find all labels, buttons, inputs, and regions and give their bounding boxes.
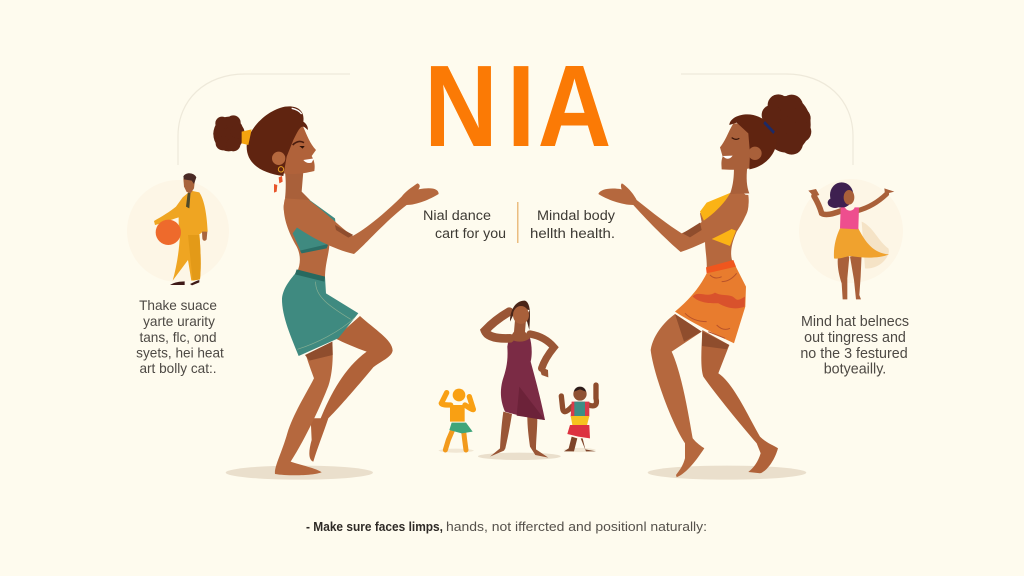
text block: left caption <box>136 298 224 376</box>
text block: left caption: Thake suace <box>139 298 217 313</box>
top <box>700 192 736 246</box>
title: NIA <box>424 42 611 171</box>
raised leg <box>309 316 393 462</box>
panel: left small figure <box>127 173 229 285</box>
child right <box>561 385 596 451</box>
neck <box>285 172 310 200</box>
footer note: hands, not iffercted and positionl naturally: <box>446 520 707 534</box>
hair <box>729 114 777 169</box>
illustration: right dancing woman <box>598 94 811 480</box>
text block: centre left: cart for you <box>435 226 506 241</box>
skirt <box>282 272 358 356</box>
child left <box>441 389 473 450</box>
ground shadows <box>438 448 596 453</box>
torso <box>700 193 749 270</box>
woman <box>485 301 554 458</box>
illustration: family group <box>438 301 596 460</box>
hair bun <box>762 94 811 155</box>
skirt <box>675 265 746 343</box>
text block: centre left <box>423 208 506 241</box>
top <box>293 198 336 253</box>
text block: centre right <box>530 208 615 241</box>
arm <box>598 183 748 252</box>
arm <box>284 183 439 254</box>
ground shadow <box>226 466 373 480</box>
text block: left caption: syets, hei heat <box>136 346 224 360</box>
panel: right small figure <box>799 179 903 299</box>
face <box>278 120 316 174</box>
face <box>720 123 755 170</box>
text block: right caption: out tingress and <box>804 330 906 346</box>
hair <box>247 106 308 176</box>
text block: left caption: yarte urarity <box>143 314 215 329</box>
text block: left caption: art bolly cat:. <box>139 361 217 376</box>
footer note: - Make sure faces limps, <box>306 520 443 534</box>
neck <box>730 167 749 194</box>
text block: right caption <box>800 314 909 378</box>
front leg <box>651 314 704 477</box>
text block: centre left: Nial dance <box>423 208 491 223</box>
ground shadow <box>648 466 806 480</box>
text block: centre right: hellth health. <box>530 226 615 241</box>
icon: woman in yellow skirt <box>808 182 894 299</box>
torso <box>284 197 335 278</box>
text block: right caption: no the 3 festured <box>800 346 908 362</box>
earring <box>274 176 283 193</box>
icon: man with orange ball <box>154 173 208 285</box>
hair bun <box>213 115 244 151</box>
text block: left caption: tans, flc, ond <box>139 330 217 345</box>
standing leg <box>275 342 333 475</box>
illustration: left dancing woman <box>213 106 439 480</box>
text block: centre right: Mindal body <box>537 208 615 223</box>
back leg <box>701 330 778 473</box>
text block: right caption: Mind hat belnecs <box>801 314 909 330</box>
text block: right caption: botyeailly. <box>824 362 886 378</box>
footer note <box>306 520 707 534</box>
